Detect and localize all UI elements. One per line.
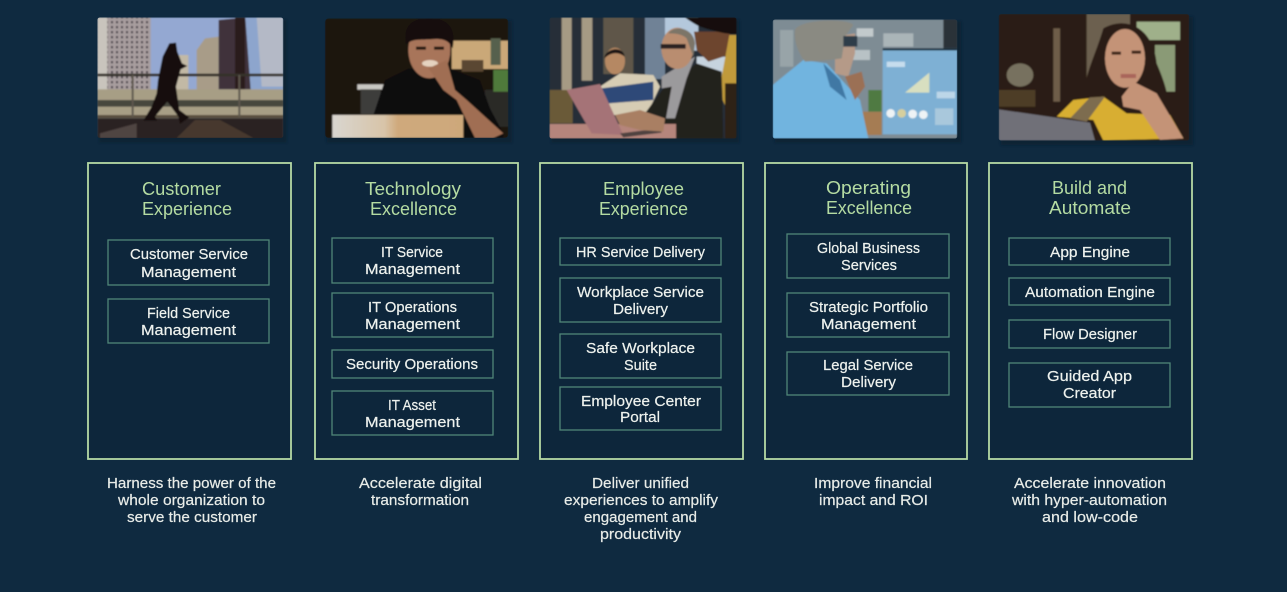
heading: Build and Automate <box>1049 178 1131 218</box>
item: Workplace Service Delivery: Delivery <box>613 301 668 318</box>
item: App Engine: App Engine <box>1050 244 1130 261</box>
text: technology excellence description: transformation <box>371 492 469 509</box>
panel: Customer Experience <box>88 163 291 459</box>
item: IT Service Management: IT Service <box>381 244 443 261</box>
item: App Engine <box>1009 238 1170 265</box>
text: employee experience description: Deliver unified <box>592 475 689 492</box>
photo: man viewing analytics monitor <box>773 19 961 143</box>
item: IT Service Management: Management <box>365 261 461 278</box>
heading: Technology Excellence: Excellence <box>370 199 457 219</box>
text: build and automate description: Accelerate innovation <box>1014 475 1166 492</box>
item: HR Service Delivery <box>560 238 721 265</box>
heading: Build and Automate: Automate <box>1049 198 1131 218</box>
item: Safe Workplace Suite <box>560 334 721 378</box>
text: build and automate description: with hyper-automation <box>1011 492 1167 509</box>
item: Legal Service Delivery: Delivery <box>841 374 896 391</box>
item: Workplace Service Delivery: Workplace Service <box>577 284 704 301</box>
item: Global Business Services: Global Business <box>817 240 920 257</box>
heading: Operating Excellence: Excellence <box>826 198 912 218</box>
item: Security Operations: Security Operations <box>346 356 478 373</box>
text: technology excellence description: Accelerate digital <box>359 475 482 492</box>
text: employee experience description: experiences to amplify <box>564 492 719 509</box>
item: Guided App Creator: Guided App <box>1047 368 1132 385</box>
text: build and automate description: and low-code <box>1042 509 1138 526</box>
item: Strategic Portfolio Management: Management <box>821 316 917 333</box>
item: Field Service Management <box>108 299 269 343</box>
item: Safe Workplace Suite: Safe Workplace <box>586 340 695 357</box>
item: IT Operations Management: Management <box>365 316 461 333</box>
text: build and automate description <box>1011 475 1167 526</box>
heading: Employee Experience: Experience <box>599 199 688 219</box>
heading: Customer Experience: Experience <box>142 199 232 219</box>
item: Legal Service Delivery: Legal Service <box>823 357 913 374</box>
item: IT Operations Management <box>332 293 493 337</box>
text: employee experience description: engagement and <box>584 509 697 526</box>
item: HR Service Delivery: HR Service Delivery <box>576 244 705 261</box>
item: Automation Engine <box>1009 278 1170 305</box>
panel: Build and Automate <box>989 163 1192 459</box>
text: customer experience description: Harness the power of the <box>107 475 276 492</box>
item: IT Asset Management: IT Asset <box>388 397 437 414</box>
item: Employee Center Portal: Portal <box>620 409 660 426</box>
panel: Technology Excellence <box>315 163 518 459</box>
item: Automation Engine: Automation Engine <box>1025 284 1155 301</box>
text: customer experience description: serve the customer <box>127 509 257 526</box>
item: Field Service Management: Management <box>141 322 237 339</box>
heading: Operating Excellence: Operating <box>826 178 911 198</box>
item: Strategic Portfolio Management: Strategic Portfolio <box>809 299 928 316</box>
heading: Technology Excellence <box>365 179 461 219</box>
photo: three colleagues around a laptop <box>549 17 739 143</box>
item: IT Asset Management: Management <box>365 414 461 431</box>
item: IT Operations Management: IT Operations <box>368 299 457 316</box>
item: IT Asset Management <box>332 391 493 435</box>
item: Security Operations <box>332 350 493 378</box>
panel: Operating Excellence <box>765 163 967 459</box>
item: Guided App Creator: Creator <box>1063 385 1116 402</box>
item: Customer Service Management: Management <box>141 264 237 281</box>
item: Global Business Services <box>787 234 949 278</box>
item: Employee Center Portal: Employee Center <box>581 393 701 410</box>
heading: Technology Excellence: Technology <box>365 179 461 199</box>
item: Workplace Service Delivery <box>560 278 721 322</box>
item: Guided App Creator <box>1009 363 1170 407</box>
text: operating excellence description: impact and ROI <box>819 492 928 509</box>
heading: Customer Experience: Customer <box>142 179 221 199</box>
photo: woman thinking at laptop <box>999 14 1193 145</box>
text: technology excellence description <box>359 475 482 509</box>
item: Global Business Services: Services <box>841 257 897 274</box>
heading: Employee Experience: Employee <box>603 179 684 199</box>
text: customer experience description <box>107 475 276 526</box>
photo: smiling man at laptop <box>325 18 512 143</box>
item: Customer Service Management <box>108 240 269 285</box>
text: customer experience description: whole organization to <box>117 492 265 509</box>
heading: Build and Automate: Build and <box>1052 178 1127 198</box>
photo: person walking past city buildings <box>97 17 287 143</box>
item: IT Service Management <box>332 238 493 283</box>
heading: Customer Experience <box>142 179 232 219</box>
panel: Employee Experience <box>540 163 743 459</box>
item: Employee Center Portal <box>560 387 721 430</box>
text: employee experience description: productivity <box>600 526 682 543</box>
heading: Employee Experience <box>599 179 688 219</box>
text: operating excellence description: Improve financial <box>814 475 932 492</box>
item: Customer Service Management: Customer Service <box>130 246 248 263</box>
item: Field Service Management: Field Service <box>147 305 230 322</box>
heading: Operating Excellence <box>826 178 912 218</box>
text: employee experience description <box>564 475 719 543</box>
text: operating excellence description <box>814 475 932 509</box>
item: Flow Designer: Flow Designer <box>1043 326 1137 343</box>
item: Legal Service Delivery <box>787 352 949 395</box>
item: Strategic Portfolio Management <box>787 293 949 337</box>
item: Flow Designer <box>1009 320 1170 348</box>
item: Safe Workplace Suite: Suite <box>624 357 657 374</box>
